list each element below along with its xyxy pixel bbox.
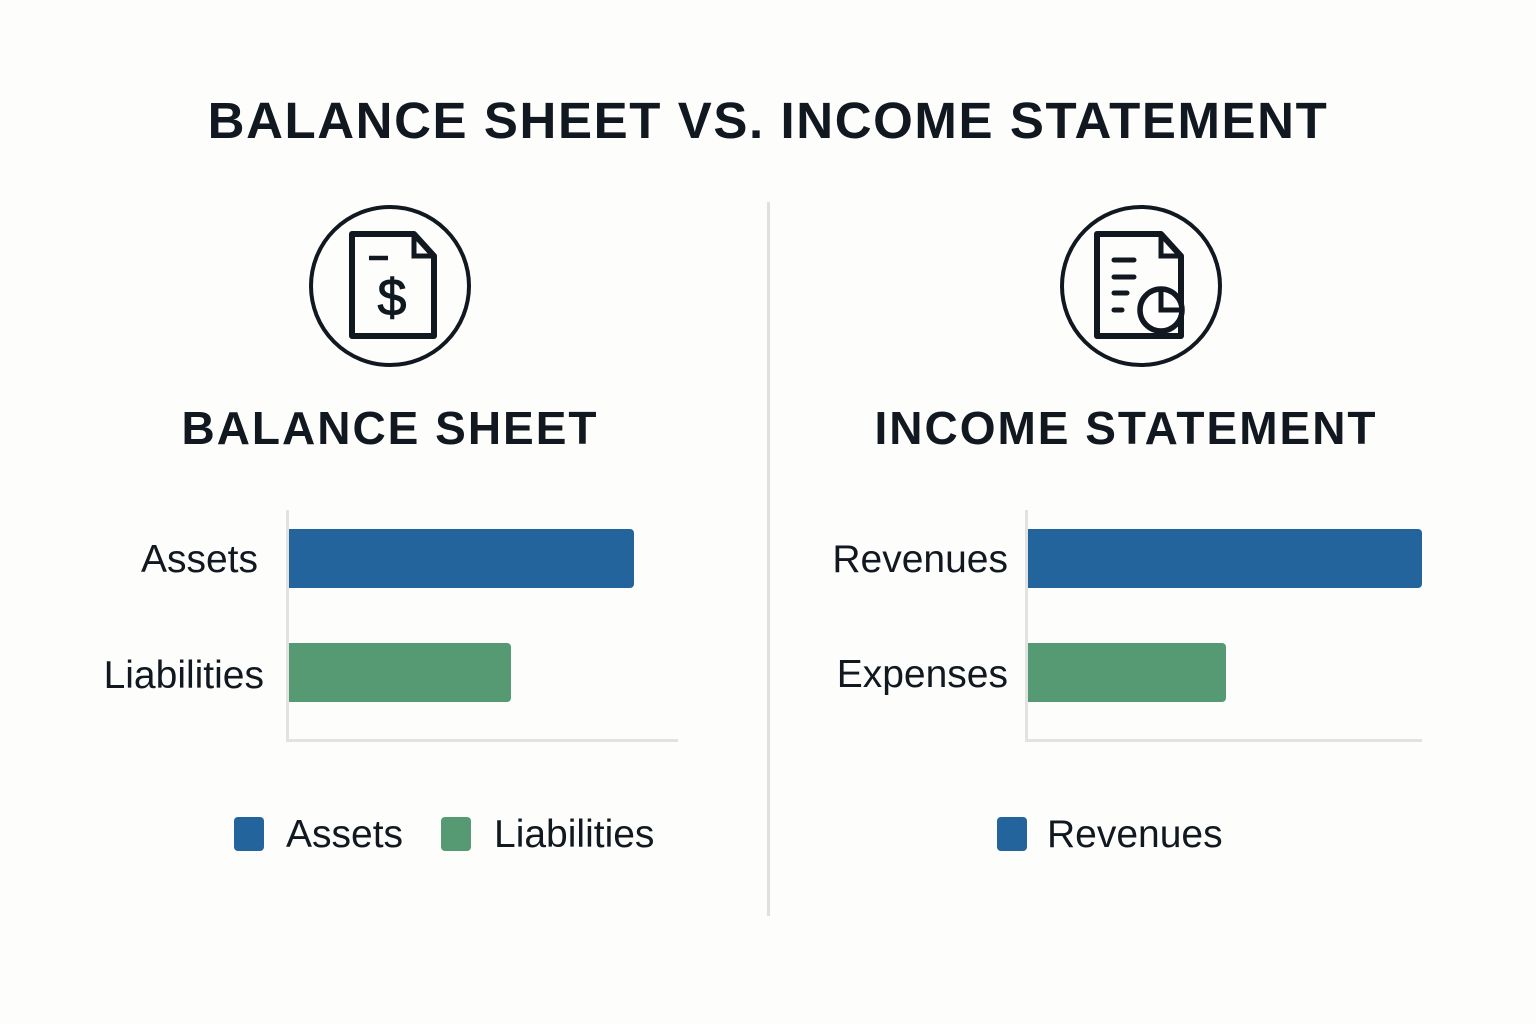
label: Liabilities: Liabilities [104,654,264,697]
icon: income statement document [1060,205,1222,367]
heading: balance sheet: BALANCE SHEET [181,402,599,454]
legend: balance sheet: Liabilities [494,813,654,856]
bar: Revenues [1028,529,1422,588]
bar chart: revenues vs expenses [832,510,1422,742]
panel: income statement [832,205,1422,856]
label: Assets: Assets [141,538,258,581]
label: Expenses: Expenses [837,653,1008,696]
bar: Expenses [1028,643,1226,702]
bar: Liabilities [289,643,511,702]
heading: income statement: INCOME STATEMENT [874,402,1378,454]
bar chart: assets vs liabilities [104,510,678,742]
panel: balance sheet [104,205,678,856]
legend: income statement: Revenues [1047,813,1223,856]
title: BALANCE SHEET VS. INCOME STATEMENT [208,92,1328,149]
icon: balance sheet document [309,205,471,367]
legend: balance sheet [234,813,654,856]
bar: Assets [289,529,634,588]
icon: balance sheet document: $ [378,269,407,327]
legend: balance sheet: Assets [286,813,403,856]
label: Revenues: Revenues [832,538,1008,581]
